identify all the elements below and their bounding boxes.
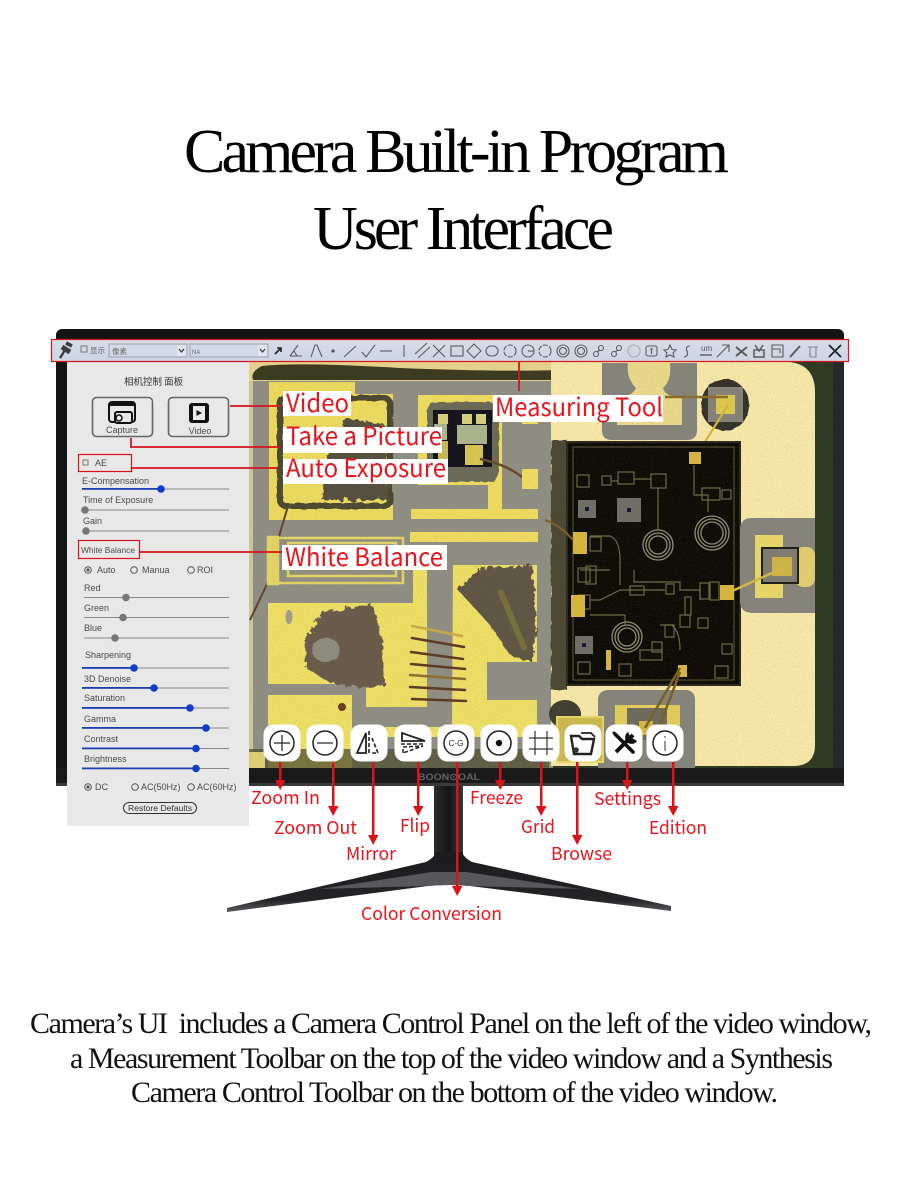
callout: White Balance: White Balance [285, 538, 443, 574]
image quality sliders: Gamma [84, 714, 116, 724]
label: Settings: Settings [594, 785, 661, 811]
capture button [92, 398, 152, 436]
bottom-left pad [268, 695, 352, 768]
display selectors: 显示 [90, 345, 105, 356]
bottom gray pad [598, 668, 695, 768]
image quality sliders: Saturation [84, 693, 125, 703]
measurement toolbar: um [701, 344, 712, 353]
title [184, 118, 729, 263]
AE option [83, 458, 107, 468]
title: User Interface [313, 195, 614, 263]
icon: mirror [350, 724, 388, 762]
white balance modes: ROI [197, 565, 213, 575]
measuring tool icons [275, 343, 841, 358]
label: Browse: Browse [551, 840, 612, 866]
panel heading: 相机控制 面板 [124, 374, 184, 388]
arrow: mirror [368, 762, 378, 845]
callout: Video: Video [286, 384, 349, 420]
display selectors: NA [192, 350, 200, 356]
colour gain sliders: Blue [84, 623, 102, 633]
white balance modes: Manua [142, 565, 170, 575]
concentric trace frame [268, 537, 403, 584]
brand logo: BOON⊙OAL [418, 772, 480, 783]
bond wires [410, 626, 466, 701]
die circuitry [577, 465, 732, 678]
die gold bond points [571, 452, 734, 677]
icon: flip [394, 724, 432, 762]
title: Camera Built-in Program [184, 118, 729, 186]
monitor body [56, 329, 844, 786]
description text: Camera Control Toolbar on the bottom of the video window. [131, 1076, 778, 1109]
arrow: grid [536, 762, 546, 816]
exposure sliders: E-Compensation [82, 476, 149, 486]
label: Color Conversion: Color Conversion [361, 900, 502, 926]
top gray U trace [602, 363, 697, 440]
arrow: flip [413, 762, 424, 816]
description text [30, 1007, 872, 1109]
arrow: freeze [495, 762, 506, 790]
large lower-left pad [268, 570, 427, 707]
colour gain sliders: Red [84, 583, 101, 593]
restore defaults button: Restore Defaults [128, 803, 192, 813]
gold pad with small die [410, 395, 538, 542]
icon: zoom out [306, 724, 344, 762]
label: Edition: Edition [649, 814, 707, 840]
exposure sliders: Time of Exposure [83, 495, 153, 505]
right gold plate [551, 362, 815, 766]
callout: Auto Exposure: Auto Exposure [286, 449, 446, 485]
gold pad with wire bond [250, 382, 393, 620]
white balance modes [85, 565, 213, 575]
video button: Video [189, 426, 211, 436]
power frequency options [85, 782, 237, 792]
icon: color conversion [438, 724, 474, 762]
exposure sliders [81, 476, 229, 535]
image quality sliders: Contrast [84, 734, 119, 744]
colour gain sliders: Green [84, 603, 109, 613]
label: Mirror: Mirror [346, 840, 397, 866]
power frequency options: AC(60Hz) [197, 782, 237, 792]
exposure sliders: Gain [83, 516, 102, 526]
arrow: settings [622, 762, 632, 790]
image quality sliders: Brightness [84, 754, 127, 764]
large lower-middle pad [385, 565, 537, 737]
measurement toolbar [52, 340, 848, 361]
arrow: edition [668, 762, 678, 816]
microscope image: circuit chip [249, 362, 833, 768]
monitor stand [227, 784, 671, 912]
callout: Take a Picture: Take a Picture [286, 417, 442, 453]
AE option: AE [95, 458, 107, 468]
arrow: zoom out [328, 762, 338, 816]
label: Grid: Grid [521, 813, 555, 839]
label: Zoom In: Zoom In [251, 784, 320, 810]
arrow: color conversion [452, 762, 462, 896]
power frequency options: AC(50Hz) [141, 782, 181, 792]
right gray pad [730, 518, 815, 613]
black die [545, 440, 740, 690]
colour gain sliders [84, 583, 229, 642]
image quality sliders [82, 650, 229, 772]
label: Freeze: Freeze [470, 784, 523, 810]
label: Zoom Out: Zoom Out [274, 814, 357, 840]
camera control panel [67, 362, 249, 826]
callout leader lines [131, 362, 519, 552]
top-right bond pad [665, 379, 749, 458]
callout: Measuring Tool: Measuring Tool [495, 388, 663, 424]
description text: a Measurement Toolbar on the top of the video window and a Synthesis [70, 1042, 833, 1075]
video button [168, 398, 228, 436]
power frequency options: DC [95, 782, 108, 792]
red callout boxes [52, 340, 848, 558]
image quality sliders: Sharpening [85, 650, 131, 660]
icon: edition [646, 724, 684, 762]
label: Flip: Flip [400, 812, 430, 838]
synthesis camera control toolbar [264, 724, 684, 762]
die inductors [612, 516, 729, 652]
die gray pads [575, 498, 641, 654]
display selectors: 像素 [112, 346, 127, 357]
arrow: zoom in [275, 762, 286, 790]
icon: browse [564, 724, 602, 762]
image quality sliders: 3D Denoise [84, 674, 131, 684]
icon: grid [522, 724, 560, 762]
display selectors [81, 344, 268, 357]
description text: Camera’s UI includes a Camera Control Panel on the left of the video window, [30, 1007, 872, 1040]
arrow: browse [572, 762, 582, 845]
icon: freeze [480, 724, 518, 762]
bottom gold block [549, 700, 603, 762]
white balance heading: White Balance [81, 545, 135, 555]
icon: color conversion: C-G [449, 739, 463, 748]
left gray substrate [249, 362, 600, 768]
icon: zoom in [264, 724, 300, 762]
icon: settings [606, 724, 642, 762]
capture button: Capture [106, 425, 138, 435]
white balance modes: Auto [97, 565, 116, 575]
icon: pushpin logo [60, 343, 72, 358]
